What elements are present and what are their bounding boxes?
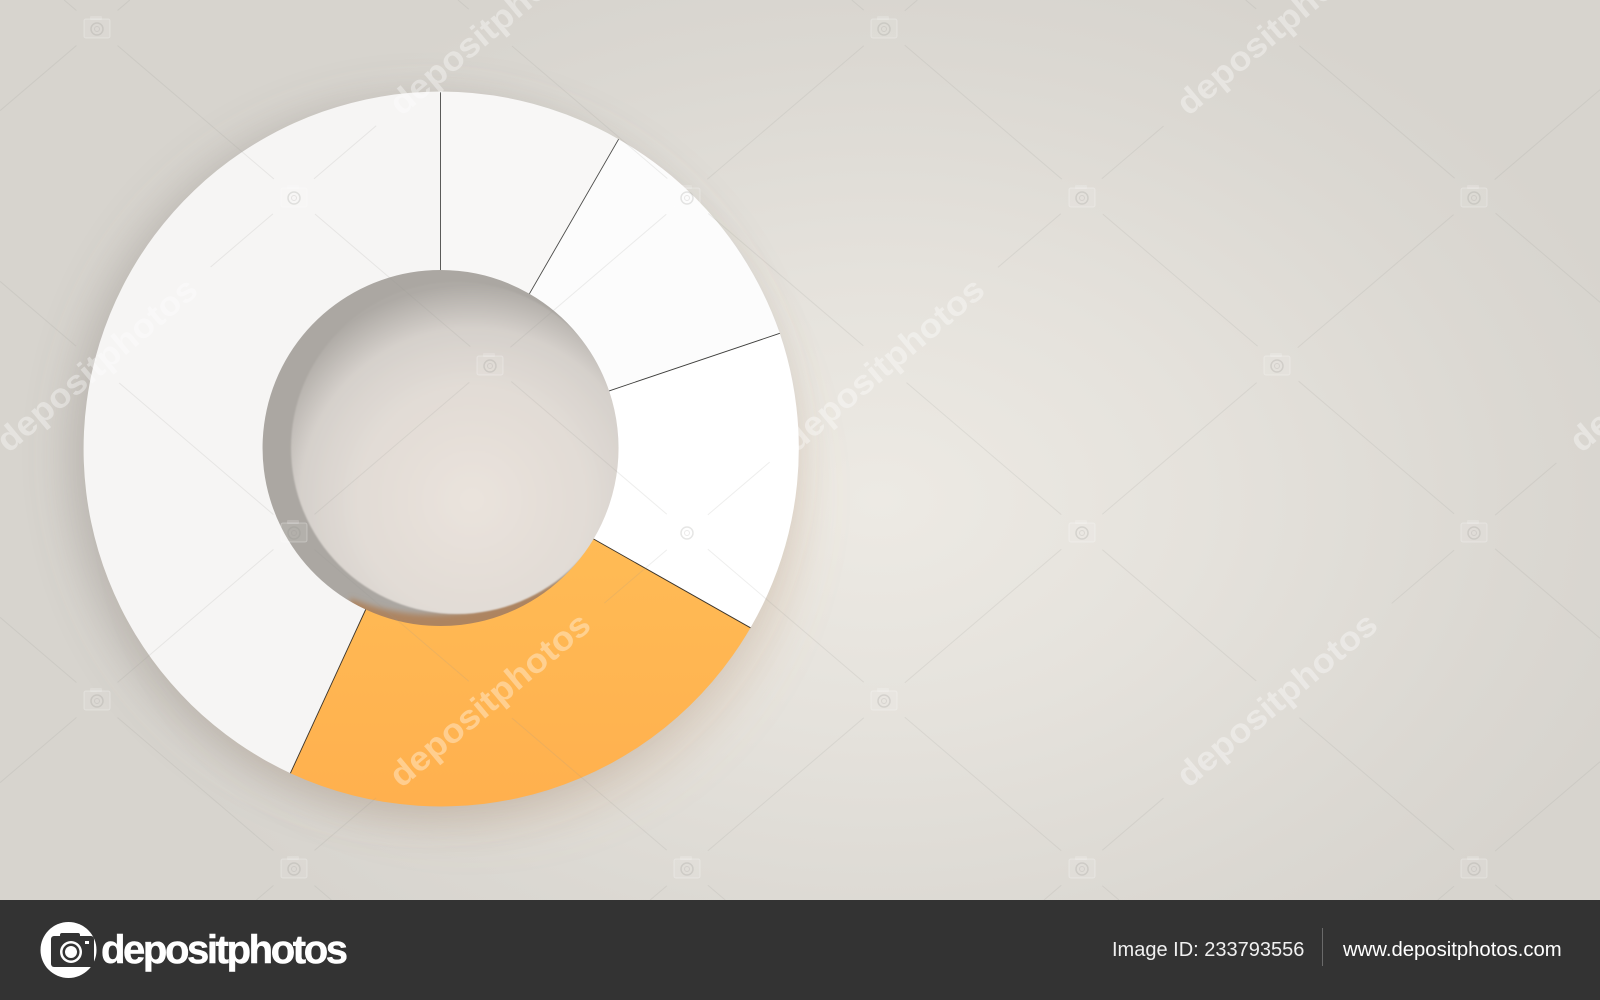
segment: right white slice bbox=[594, 333, 799, 628]
watermark text: depositphotos bbox=[382, 605, 598, 795]
watermark text: depositphotos bbox=[1169, 605, 1385, 795]
logo wordmark: depositphotos bbox=[101, 928, 348, 972]
watermark camera icons bbox=[84, 16, 1487, 878]
website url: www.depositphotos.com bbox=[1342, 939, 1562, 961]
donut chart bbox=[84, 92, 799, 806]
icon: camera logo bbox=[40, 922, 96, 978]
donut hole with recessed wall bbox=[255, 262, 627, 640]
footer separator bbox=[1322, 928, 1323, 966]
segment: upper-right white slice bbox=[529, 139, 780, 391]
segment: highlighted orange slice bbox=[290, 539, 750, 806]
segment dividers bbox=[290, 92, 780, 773]
watermark text: depositphotos bbox=[776, 270, 992, 460]
segment: top white slice bbox=[440, 92, 619, 294]
watermark text bbox=[0, 0, 1600, 795]
segment: large left white slice bbox=[84, 92, 441, 773]
footer bar bbox=[0, 900, 1600, 1000]
drop shadow of donut bbox=[70, 100, 805, 830]
image id text: Image ID: 233793556 bbox=[1112, 939, 1304, 961]
